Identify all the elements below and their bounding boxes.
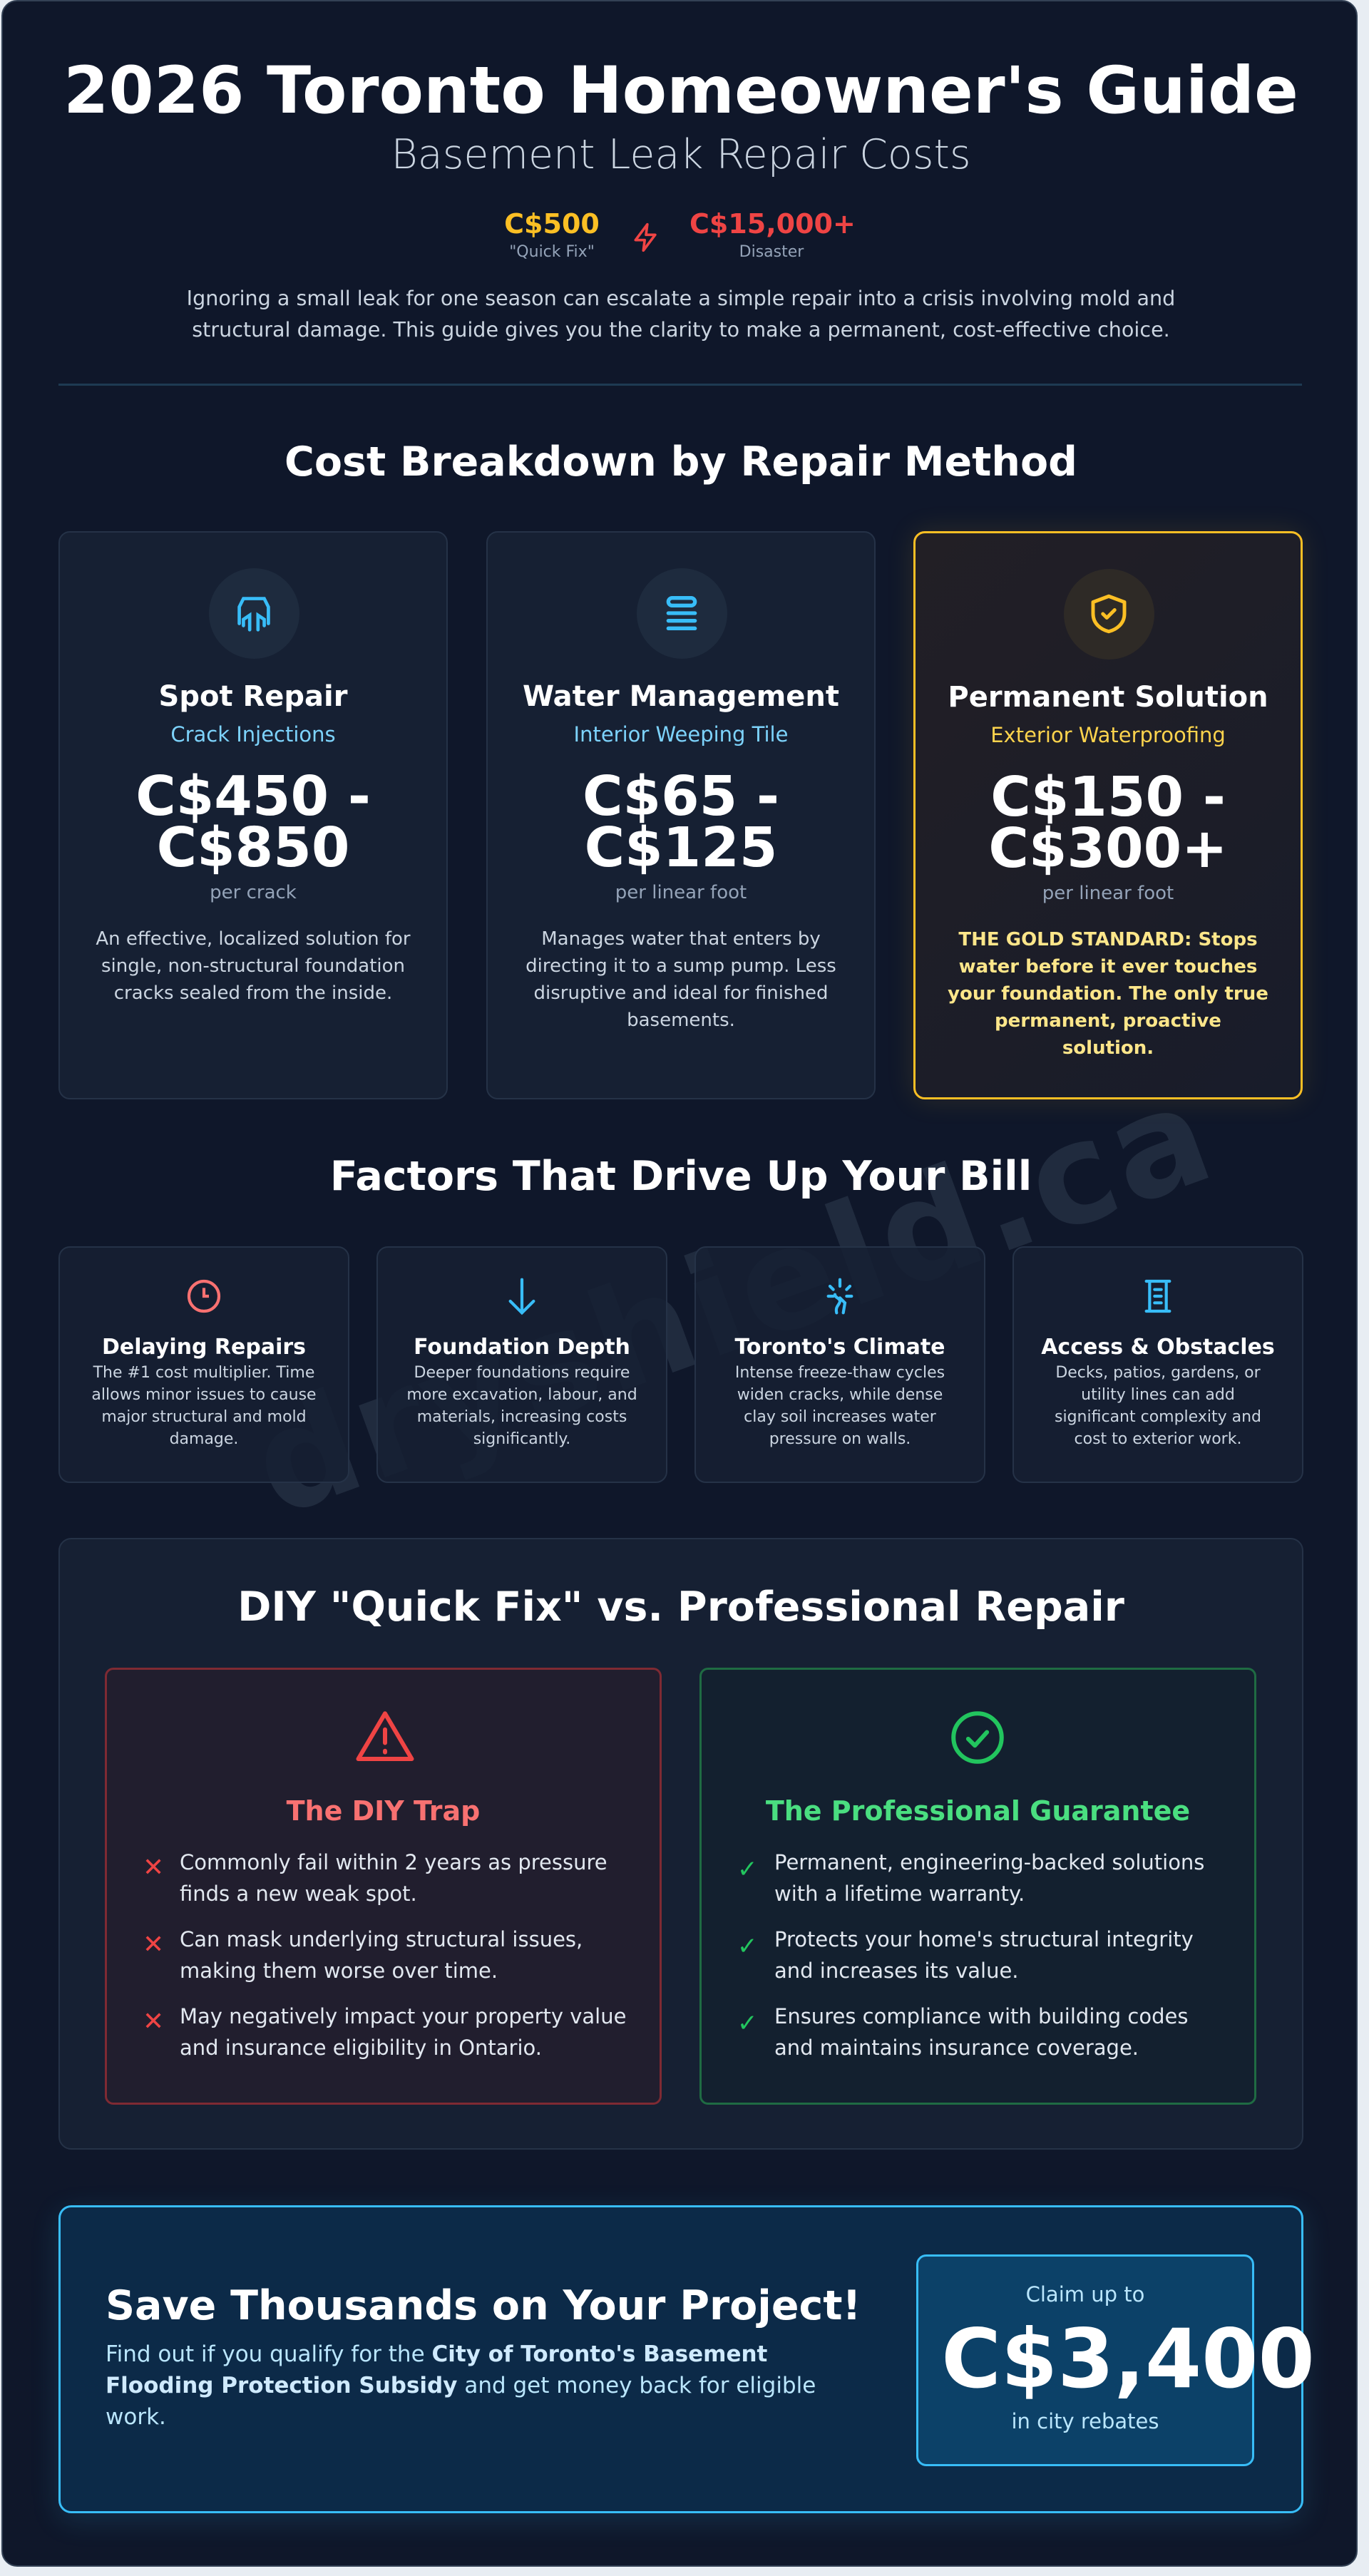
icon: obstacle [1145,1279,1171,1313]
sub-panel: professional guarantee [699,1668,1256,2105]
card text [948,681,1268,1059]
factor text: Intense freeze-thaw cycles widen cracks, while dense clay soil increases water pressure on walls. [735,1364,945,1448]
callout: subsidy CTA [58,2205,1303,2513]
card text: Spot Repair [159,680,347,713]
rebate box: in city rebates [1011,2409,1159,2433]
list: ✕ [143,1853,164,1882]
stat: disaster: Disaster [739,243,804,261]
rebate box: Claim up to [1026,2282,1144,2306]
factor text: Access & Obstacles [1041,1335,1275,1360]
factor text: Toronto's Climate [734,1335,945,1360]
card text: Permanent Solution [948,681,1268,714]
stat: quick fix: C$500 [504,208,600,240]
intro paragraph: Ignoring a small leak for one season can escalate a simple repair into a crisis involving mold and structural damage. This guide gives you the clarity to make a permanent, cost-effective choice. [187,286,1175,342]
factor: foundation depth [376,1246,667,1483]
stat: disaster: C$15,000+ [689,208,856,240]
card text: C$300+ [988,817,1228,881]
list: ✓ [737,2009,757,2038]
icon: weeping tile [637,568,727,659]
factor text: Deeper foundations require more excavation, labour, and materials, increasing costs significantly. [406,1364,637,1448]
card text [96,680,411,1004]
cost escalation stats [504,208,856,261]
icon: arrow down [509,1278,535,1315]
list [143,1850,626,2060]
card text: THE GOLD STANDARD: Stops water before it ever touches your foundation. The only true permanent, proactive solution. [948,929,1268,1059]
factor text [1041,1335,1275,1448]
list: Permanent, engineering-backed solutions with a lifetime warranty. [774,1850,1204,1906]
card text: Crack Injections [170,722,336,746]
stat: quick fix: "Quick Fix" [509,243,595,261]
list: ✕ [143,2007,164,2036]
factor text: Decks, patios, gardens, or utility lines can add significant complexity and cost to exterior work. [1055,1364,1261,1448]
panel: spot repair [58,531,448,1099]
title: 2026 Toronto Homeowner's Guide [63,53,1298,128]
card text: C$850 [157,816,349,880]
panel: DIY vs professional [58,1538,1303,2150]
title: The Professional Guarantee [766,1795,1190,1827]
list: May negatively impact your property value and insurance eligibility in Ontario. [180,2004,626,2060]
card text: per linear foot [615,882,747,903]
icon: clock [187,1279,221,1313]
card text: Interior Weeping Tile [574,722,788,746]
card text: Water Management [523,680,839,713]
factor: access obstacles [1012,1246,1303,1483]
list: ✕ [143,1930,164,1959]
panel: water management [486,531,876,1099]
watermark: dryshield.ca [232,1052,1234,1548]
title: The DIY Trap [287,1795,480,1827]
card text: C$65 - [583,765,779,828]
list: Can mask underlying structural issues, making them worse over time. [180,1927,583,1983]
rebate box [916,2254,1254,2466]
list [737,1850,1204,2060]
sub-panel: DIY trap [105,1668,662,2105]
icon: freeze crack [827,1278,853,1315]
card text: C$450 - [135,765,371,828]
list: ✓ [737,1932,757,1961]
stat: disaster [689,208,856,261]
icon: warning [357,1711,414,1761]
heading: cost breakdown: Cost Breakdown by Repair Method [284,438,1077,486]
factor text: Foundation Depth [414,1335,630,1360]
list: Ensures compliance with building codes and maintains insurance coverage. [774,2004,1188,2060]
card text [523,680,839,1031]
card text: per linear foot [1042,883,1174,904]
icon: lightning [634,222,657,252]
subtitle: Basement Leak Repair Costs [391,131,971,178]
heading: factors: Factors That Drive Up Your Bill [330,1153,1032,1200]
list: Protects your home's structural integrity and increases its value. [774,1927,1194,1983]
stat: quick fix [504,208,600,261]
card text: per crack [210,882,297,903]
factor: toronto climate [694,1246,985,1483]
card text: Exterior Waterproofing [990,723,1226,747]
list: ✓ [737,1855,757,1884]
card text: C$125 [585,816,777,880]
panel: permanent solution [913,531,1303,1099]
factor text: Delaying Repairs [102,1335,306,1360]
factor: delaying repairs [58,1246,349,1483]
heading: DIY "Quick Fix" vs. Professional Repair [237,1584,1124,1631]
icon: check circle [951,1711,1004,1764]
CTA text: Find out if you qualify for the City of Toronto's Basement Flooding Protection Subsidy and get money back for eligible work. [106,2341,816,2430]
card text: C$150 - [990,766,1226,829]
card text: Manages water that enters by directing it to a sump pump. Less disruptive and ideal for finished basements. [525,928,836,1031]
list: Commonly fail within 2 years as pressure finds a new weak spot. [180,1850,607,1906]
card text: An effective, localized solution for single, non-structural foundation cracks sealed from the inside. [96,928,411,1004]
icon: crack [209,568,299,659]
rebate box: C$3,400 [941,2311,1315,2406]
icon: shield [1064,569,1154,660]
factor text: The #1 cost multiplier. Time allows minor issues to cause major structural and mold damage. [91,1364,317,1448]
CTA heading: Save Thousands on Your Project! [106,2282,861,2329]
